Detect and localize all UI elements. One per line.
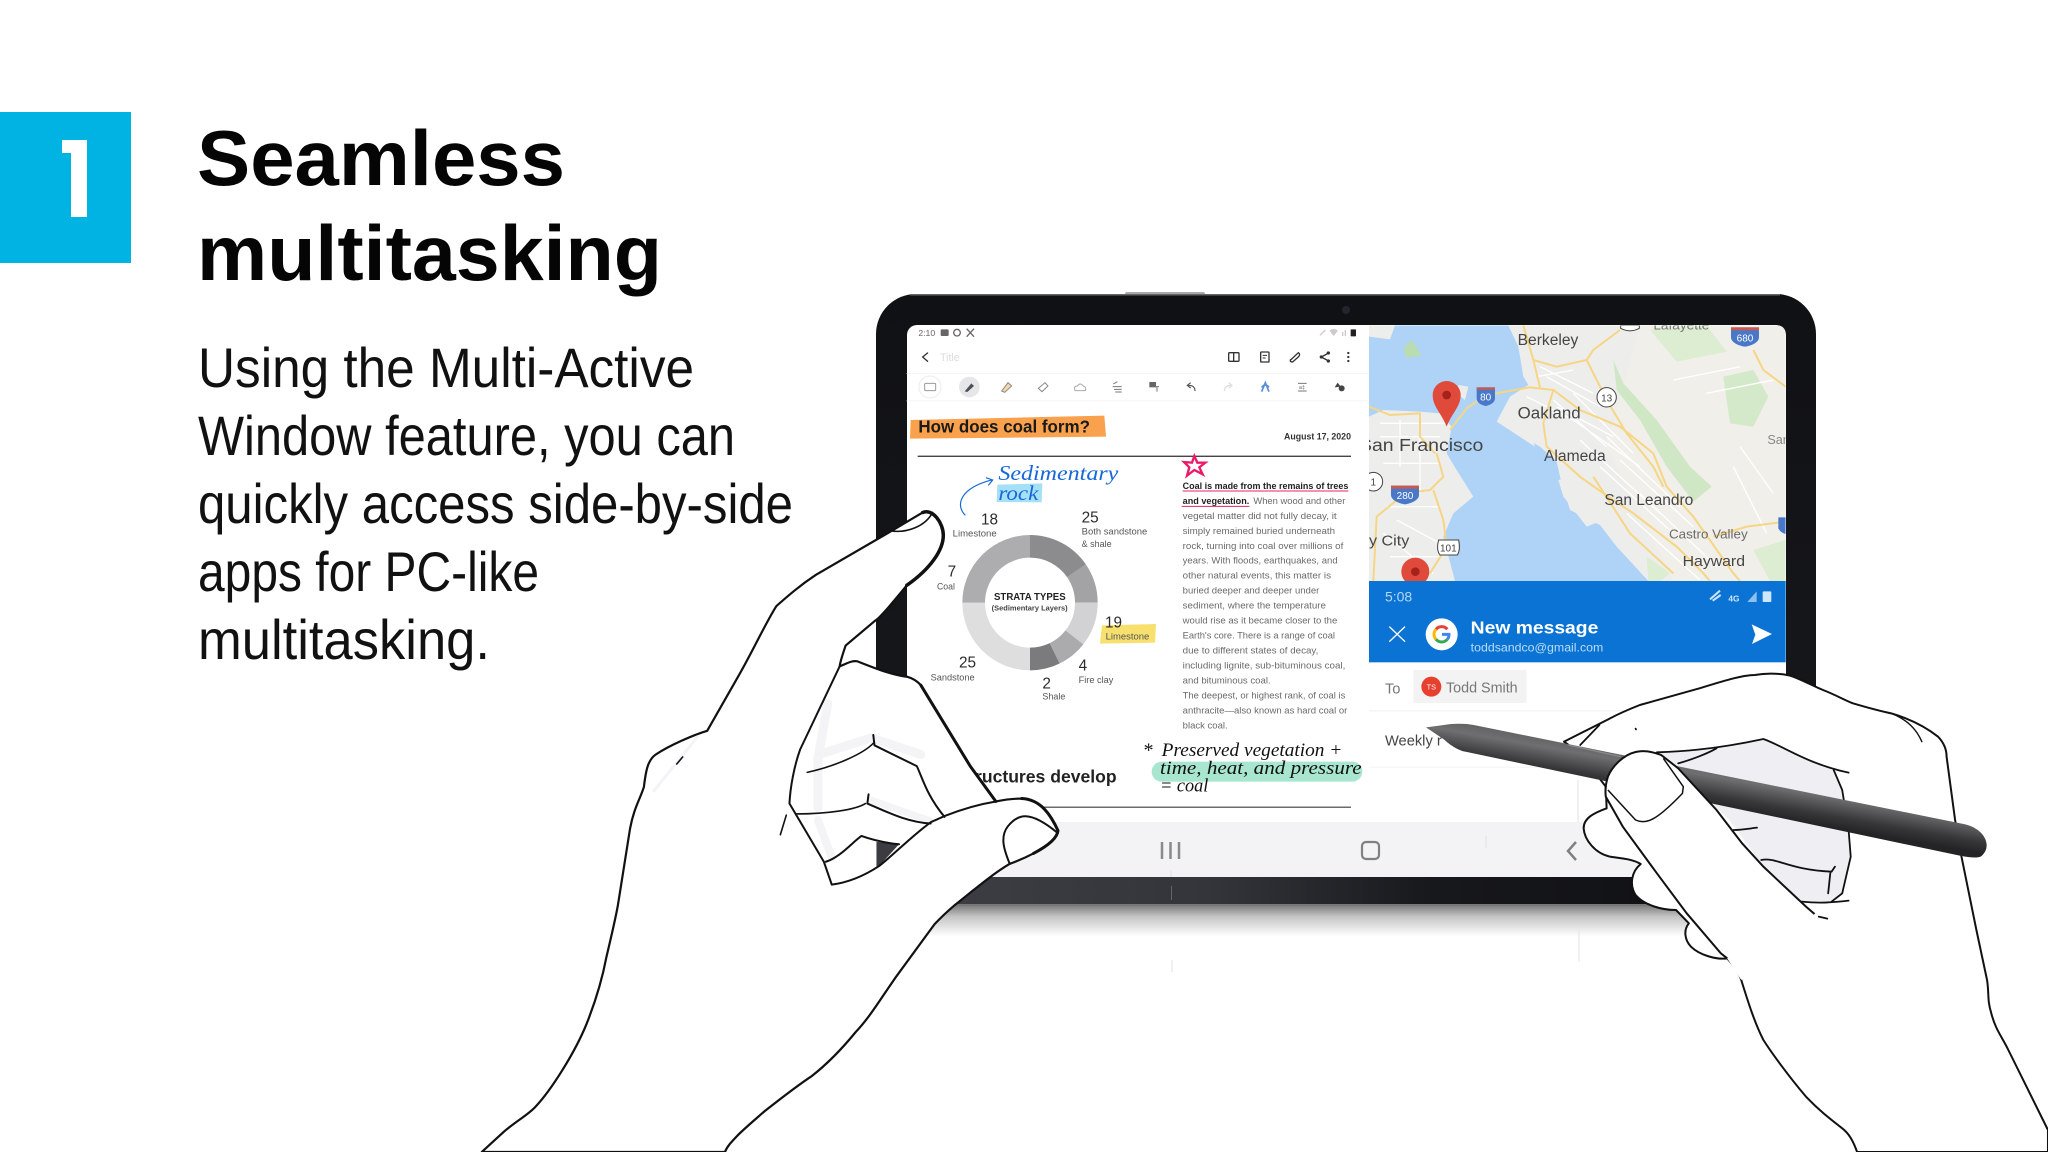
finger lines bbox=[677, 512, 1058, 885]
email header bbox=[1369, 581, 1786, 662]
paragraph: anthracite—also known as hard coal or bbox=[1183, 705, 1347, 715]
screen bbox=[907, 325, 1786, 877]
map labels: Oakland bbox=[1518, 403, 1581, 422]
email recipient row: Todd Smith bbox=[1446, 681, 1518, 697]
donut labels: Coal bbox=[937, 581, 955, 591]
email header: New message bbox=[1471, 617, 1598, 637]
paragraph: simply remained buried underneath bbox=[1183, 526, 1335, 536]
paragraph: black coal. bbox=[1183, 720, 1228, 730]
donut center label: STRATA TYPES bbox=[994, 592, 1066, 603]
map labels: Lafayette bbox=[1653, 318, 1709, 332]
donut labels: Shale bbox=[1042, 691, 1065, 701]
handwritten note: coal equation: time, heat, and pressure bbox=[1160, 758, 1362, 779]
donut labels: & shale bbox=[1082, 539, 1112, 549]
paragraph: other natural events, this matter is bbox=[1183, 571, 1332, 581]
navigation bar bbox=[907, 780, 1786, 972]
paragraph: and vegetation. bbox=[1183, 496, 1249, 506]
left hand bbox=[482, 512, 1058, 1152]
donut labels: 25 bbox=[959, 655, 976, 672]
number badge: 1 bbox=[56, 120, 92, 240]
note toolbar: a‡ bbox=[1299, 385, 1305, 391]
paragraph bbox=[1182, 481, 1348, 730]
paragraph: and bituminous coal. bbox=[1183, 675, 1271, 685]
status bar: 2:10 bbox=[918, 328, 935, 338]
title: multitasking bbox=[197, 209, 662, 297]
map islands bbox=[1403, 340, 1603, 527]
handwritten note: sedimentary rock: rock bbox=[998, 483, 1039, 505]
tablet bbox=[876, 292, 1816, 906]
donut labels bbox=[931, 509, 1149, 701]
handwritten note: coal equation: * bbox=[1143, 740, 1153, 762]
paragraph: rock, turning into coal over millions of bbox=[1183, 541, 1344, 551]
body text: multitasking. bbox=[198, 608, 490, 671]
right hand and S Pen bbox=[1426, 674, 2048, 1152]
map labels: Castro Valley bbox=[1669, 527, 1748, 541]
email header: toddsandco@gmail.com bbox=[1471, 642, 1603, 655]
map shields: 101 bbox=[1440, 544, 1457, 555]
thumb bbox=[1605, 751, 1815, 980]
palm shading bbox=[1657, 739, 1851, 902]
donut labels: Limestone bbox=[1106, 632, 1149, 642]
finger shading bbox=[654, 704, 931, 858]
handwritten note: sedimentary rock bbox=[960, 463, 1119, 515]
paragraph: Coal is made from the remains of trees bbox=[1183, 481, 1348, 491]
paragraph: would rise as it became closer to the bbox=[1182, 616, 1337, 626]
handwritten note: coal equation bbox=[1143, 740, 1362, 797]
donut labels: Fire clay bbox=[1079, 675, 1114, 685]
paragraph: sediment, where the temperature bbox=[1183, 601, 1326, 611]
map shields: 80 bbox=[1480, 393, 1492, 404]
hand outline bbox=[482, 512, 1058, 1152]
icon: Google logo bbox=[1426, 618, 1458, 650]
map shields: 280 bbox=[1397, 491, 1414, 502]
yellow highlight bbox=[1100, 624, 1156, 644]
donut labels: 25 bbox=[1082, 509, 1099, 526]
paragraph: vegetal matter did not fully decay, it bbox=[1183, 511, 1337, 521]
map labels: Hayward bbox=[1683, 554, 1745, 570]
body text: quickly access side-by-side bbox=[198, 472, 793, 535]
map highways bbox=[1369, 325, 1786, 581]
title: Seamless bbox=[197, 114, 565, 202]
map labels: Berkeley bbox=[1518, 332, 1579, 349]
paragraph: Earth's core. There is a range of coal bbox=[1183, 631, 1335, 641]
handwritten note: coal equation: = coal bbox=[1160, 776, 1208, 797]
note app bar bbox=[907, 351, 1368, 401]
note app panel bbox=[907, 328, 1368, 808]
note heading highlight: How does coal form? bbox=[918, 416, 1090, 436]
donut center label: (Sedimentary Layers) bbox=[992, 604, 1068, 613]
donut labels: 2 bbox=[1042, 675, 1051, 692]
email recipient row: To bbox=[1385, 681, 1400, 697]
donut labels: Both sandstone bbox=[1082, 526, 1147, 536]
map minor roads bbox=[1380, 367, 1773, 580]
email recipient row: TS bbox=[1427, 683, 1436, 692]
map shields: 1 bbox=[1371, 477, 1377, 488]
map shields: 680 bbox=[1737, 334, 1754, 345]
body text: apps for PC-like bbox=[198, 540, 539, 603]
paragraph: due to different states of decay, bbox=[1183, 646, 1318, 656]
donut chart bbox=[974, 546, 1086, 659]
handwritten note: coal equation: Preserved vegetation + bbox=[1161, 740, 1342, 761]
icon: pink star bbox=[1184, 456, 1205, 476]
note toolbar bbox=[919, 376, 1345, 398]
map labels: Alameda bbox=[1544, 448, 1606, 465]
map pins bbox=[1401, 381, 1461, 586]
handwritten note: sedimentary rock: Sedimentary bbox=[998, 463, 1119, 485]
note date: August 17, 2020 bbox=[1284, 432, 1351, 442]
S Pen bbox=[1426, 724, 1987, 858]
email header: 4G bbox=[1728, 594, 1739, 604]
donut labels: 19 bbox=[1105, 614, 1122, 631]
map hills bbox=[1607, 325, 1786, 581]
donut labels: 18 bbox=[981, 511, 998, 528]
body text: Window feature, you can bbox=[198, 404, 735, 467]
paragraph: The deepest, or highest rank, of coal is bbox=[1183, 690, 1346, 700]
hand outline bbox=[1564, 674, 2048, 1152]
map shields bbox=[1364, 325, 1786, 555]
map shields: 13 bbox=[1601, 393, 1613, 404]
map labels: y City bbox=[1369, 533, 1410, 549]
paragraph: including lignite, sub-bituminous coal, bbox=[1183, 660, 1345, 670]
map labels: San Leandro bbox=[1604, 492, 1693, 509]
subheading: ructures develop bbox=[975, 767, 1117, 787]
note app bar: Title bbox=[940, 352, 960, 364]
tablet corner visible behind fingers bbox=[876, 842, 899, 867]
donut labels: 7 bbox=[948, 563, 956, 580]
map water bbox=[1369, 325, 1648, 581]
body text bbox=[198, 336, 793, 671]
donut labels: 4 bbox=[1079, 658, 1088, 675]
body text: Using the Multi-Active bbox=[198, 336, 694, 399]
donut labels: Limestone bbox=[953, 529, 997, 539]
email body text: Weekly r bbox=[1385, 733, 1442, 749]
map labels: San bbox=[1767, 433, 1790, 447]
number badge bbox=[0, 112, 131, 263]
map labels: San Francisco bbox=[1359, 435, 1483, 455]
paragraph: buried deeper and deeper under bbox=[1183, 586, 1319, 596]
donut center label bbox=[992, 592, 1068, 613]
tablet shadow bbox=[900, 906, 1690, 936]
donut labels: Sandstone bbox=[931, 673, 975, 683]
status bar bbox=[918, 328, 1356, 338]
palm lines bbox=[1580, 713, 1922, 919]
paragraph: When wood and other bbox=[1253, 496, 1345, 506]
email header: 5:08 bbox=[1385, 589, 1412, 605]
title bbox=[197, 114, 662, 297]
paragraph: years. With floods, earthquakes, and bbox=[1183, 556, 1338, 566]
map labels bbox=[1359, 318, 1790, 570]
email recipient row bbox=[1369, 670, 1786, 711]
map panel bbox=[1359, 318, 1790, 768]
